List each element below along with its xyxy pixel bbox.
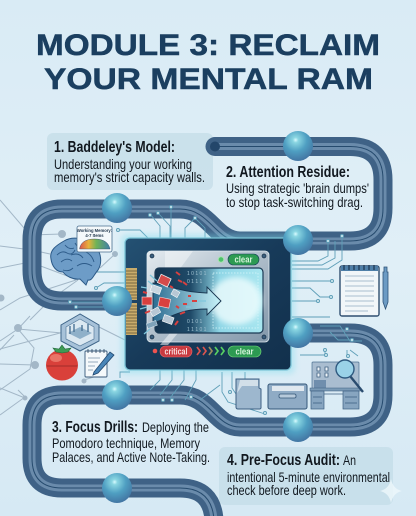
text block: 3. Focus Drills: Palaces, and Active Note-Taking. [52, 449, 210, 465]
binary digits: 1 1 1 0 1 [187, 327, 207, 333]
icon: brain with gauge [51, 226, 112, 285]
arrow out of chaos [153, 283, 221, 323]
icon: notepad and pen [85, 349, 114, 377]
critical to clear status bar: clear [236, 346, 254, 356]
binary digits: 0 1 1 1 [187, 279, 203, 285]
text block: 4. Pre-Focus Audit: An [343, 452, 356, 468]
decorative sparkle [380, 479, 402, 503]
orb 1 [283, 131, 313, 161]
panel: central memory chip [121, 234, 295, 374]
text block: 1. Baddeley's Model: 1. Baddeley's Model: [54, 139, 175, 156]
connector pins [126, 268, 137, 335]
track end cap [210, 142, 220, 152]
orb 5 [283, 318, 313, 348]
circuit traces [70, 207, 362, 414]
icon: folder [236, 379, 261, 409]
top status pill [218, 254, 259, 265]
callout panel: item 4 backing [219, 447, 393, 505]
working memory gauge card: Working Memory: [77, 228, 112, 233]
frame screws [150, 254, 266, 339]
text block: 2. Attention Residue: to stop task-switching drag. [226, 194, 363, 210]
track: lower serpentine [32, 333, 383, 516]
title: YOUR MENTAL RAM [44, 63, 373, 96]
orb 8 [102, 473, 132, 503]
icon: desk and magnifier [310, 360, 363, 409]
callout panel: item 1 backing [47, 133, 213, 190]
text block: 2. Attention Residue: Using strategic 'brain dumps' [226, 180, 369, 196]
screen [155, 268, 263, 333]
icon: tomato timer [46, 345, 78, 380]
text block: 3. Focus Drills: Deploying the [142, 419, 209, 435]
orb 7 [283, 412, 313, 442]
icon: drawer [268, 384, 307, 409]
silver frame [147, 251, 269, 342]
text block: 2. Attention Residue: 2. Attention Residue: [226, 164, 350, 181]
text block: 1. Baddeley's Model [54, 139, 205, 185]
text block: 3. Focus Drills: Pomodoro technique, Memory [52, 435, 200, 451]
brain [51, 238, 101, 285]
text block: 1. Baddeley's Model: memory's strict capacity walls. [54, 169, 205, 185]
critical to clear status bar [153, 346, 261, 357]
binary digits: 0 1 0 1 [187, 319, 203, 325]
text block: 4. Pre-Focus Audit: check before deep work. [227, 482, 346, 498]
binary digits [187, 271, 207, 333]
critical to clear status bar: critical [164, 346, 188, 356]
binary digits: 1 0 1 0 1 [187, 271, 207, 277]
text block: 4. Pre-Focus Audit [227, 452, 390, 498]
orb 6 [102, 380, 132, 410]
working memory gauge card [77, 226, 112, 252]
orb 3 [283, 225, 313, 255]
icon: notepad with pencil [340, 265, 388, 316]
icon: isometric room [61, 314, 99, 351]
chip body [125, 238, 291, 370]
top status pill: clear [234, 254, 253, 264]
orb 4 [102, 286, 132, 316]
title: MODULE 3: RECLAIM [36, 29, 380, 62]
orb row [102, 131, 313, 503]
text block: 2. Attention Residue [226, 164, 369, 210]
text block: 3. Focus Drills: 3. Focus Drills: [52, 419, 138, 436]
scattered data fragments [140, 272, 206, 334]
working memory gauge card: 4-7 Items [85, 233, 104, 238]
orb 2 [102, 193, 132, 223]
chip glow [121, 234, 295, 374]
title [36, 29, 380, 96]
text block: 1. Baddeley's Model: Understanding your working [54, 156, 192, 172]
network lines [0, 200, 125, 415]
track: upper serpentine [32, 146, 383, 301]
text block: 4. Pre-Focus Audit: 4. Pre-Focus Audit: [227, 452, 340, 469]
text block: 3. Focus Drills [52, 419, 210, 465]
